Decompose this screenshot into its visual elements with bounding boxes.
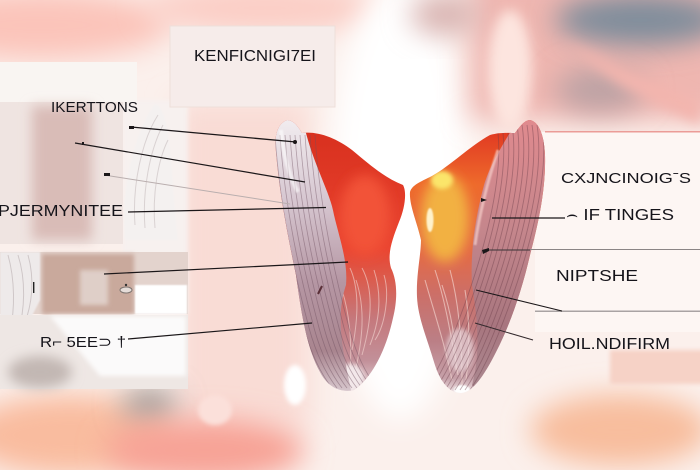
panel: lower left tissue image: [0, 252, 188, 340]
label: middle left: PJERMYNITEE: [0, 203, 123, 220]
panel: top title box: [170, 26, 335, 107]
right organ: [410, 120, 546, 393]
label: right second: ⌢ IF TINGES: [566, 207, 674, 224]
panel: upper left tissue image: [0, 62, 188, 315]
icon: small pictogram: [120, 284, 132, 293]
left organ: [275, 120, 406, 391]
markers: [82, 126, 489, 254]
label: right top: CXJNCINOIGˉS: [561, 170, 691, 187]
label: lower left: R⌐ 5EE⊃ †: [40, 334, 126, 351]
leader lines: [75, 126, 565, 340]
label: right bottom: HOIL.NDIFIRM: [549, 336, 670, 353]
panel: lower left label box: [0, 315, 188, 389]
right divider lines: [530, 131, 700, 312]
label: upper left: IKERTTONS: [51, 99, 138, 116]
title label: KENFICNIGI7EI: [194, 48, 316, 65]
label: right third: NIPTSHE: [556, 268, 638, 285]
